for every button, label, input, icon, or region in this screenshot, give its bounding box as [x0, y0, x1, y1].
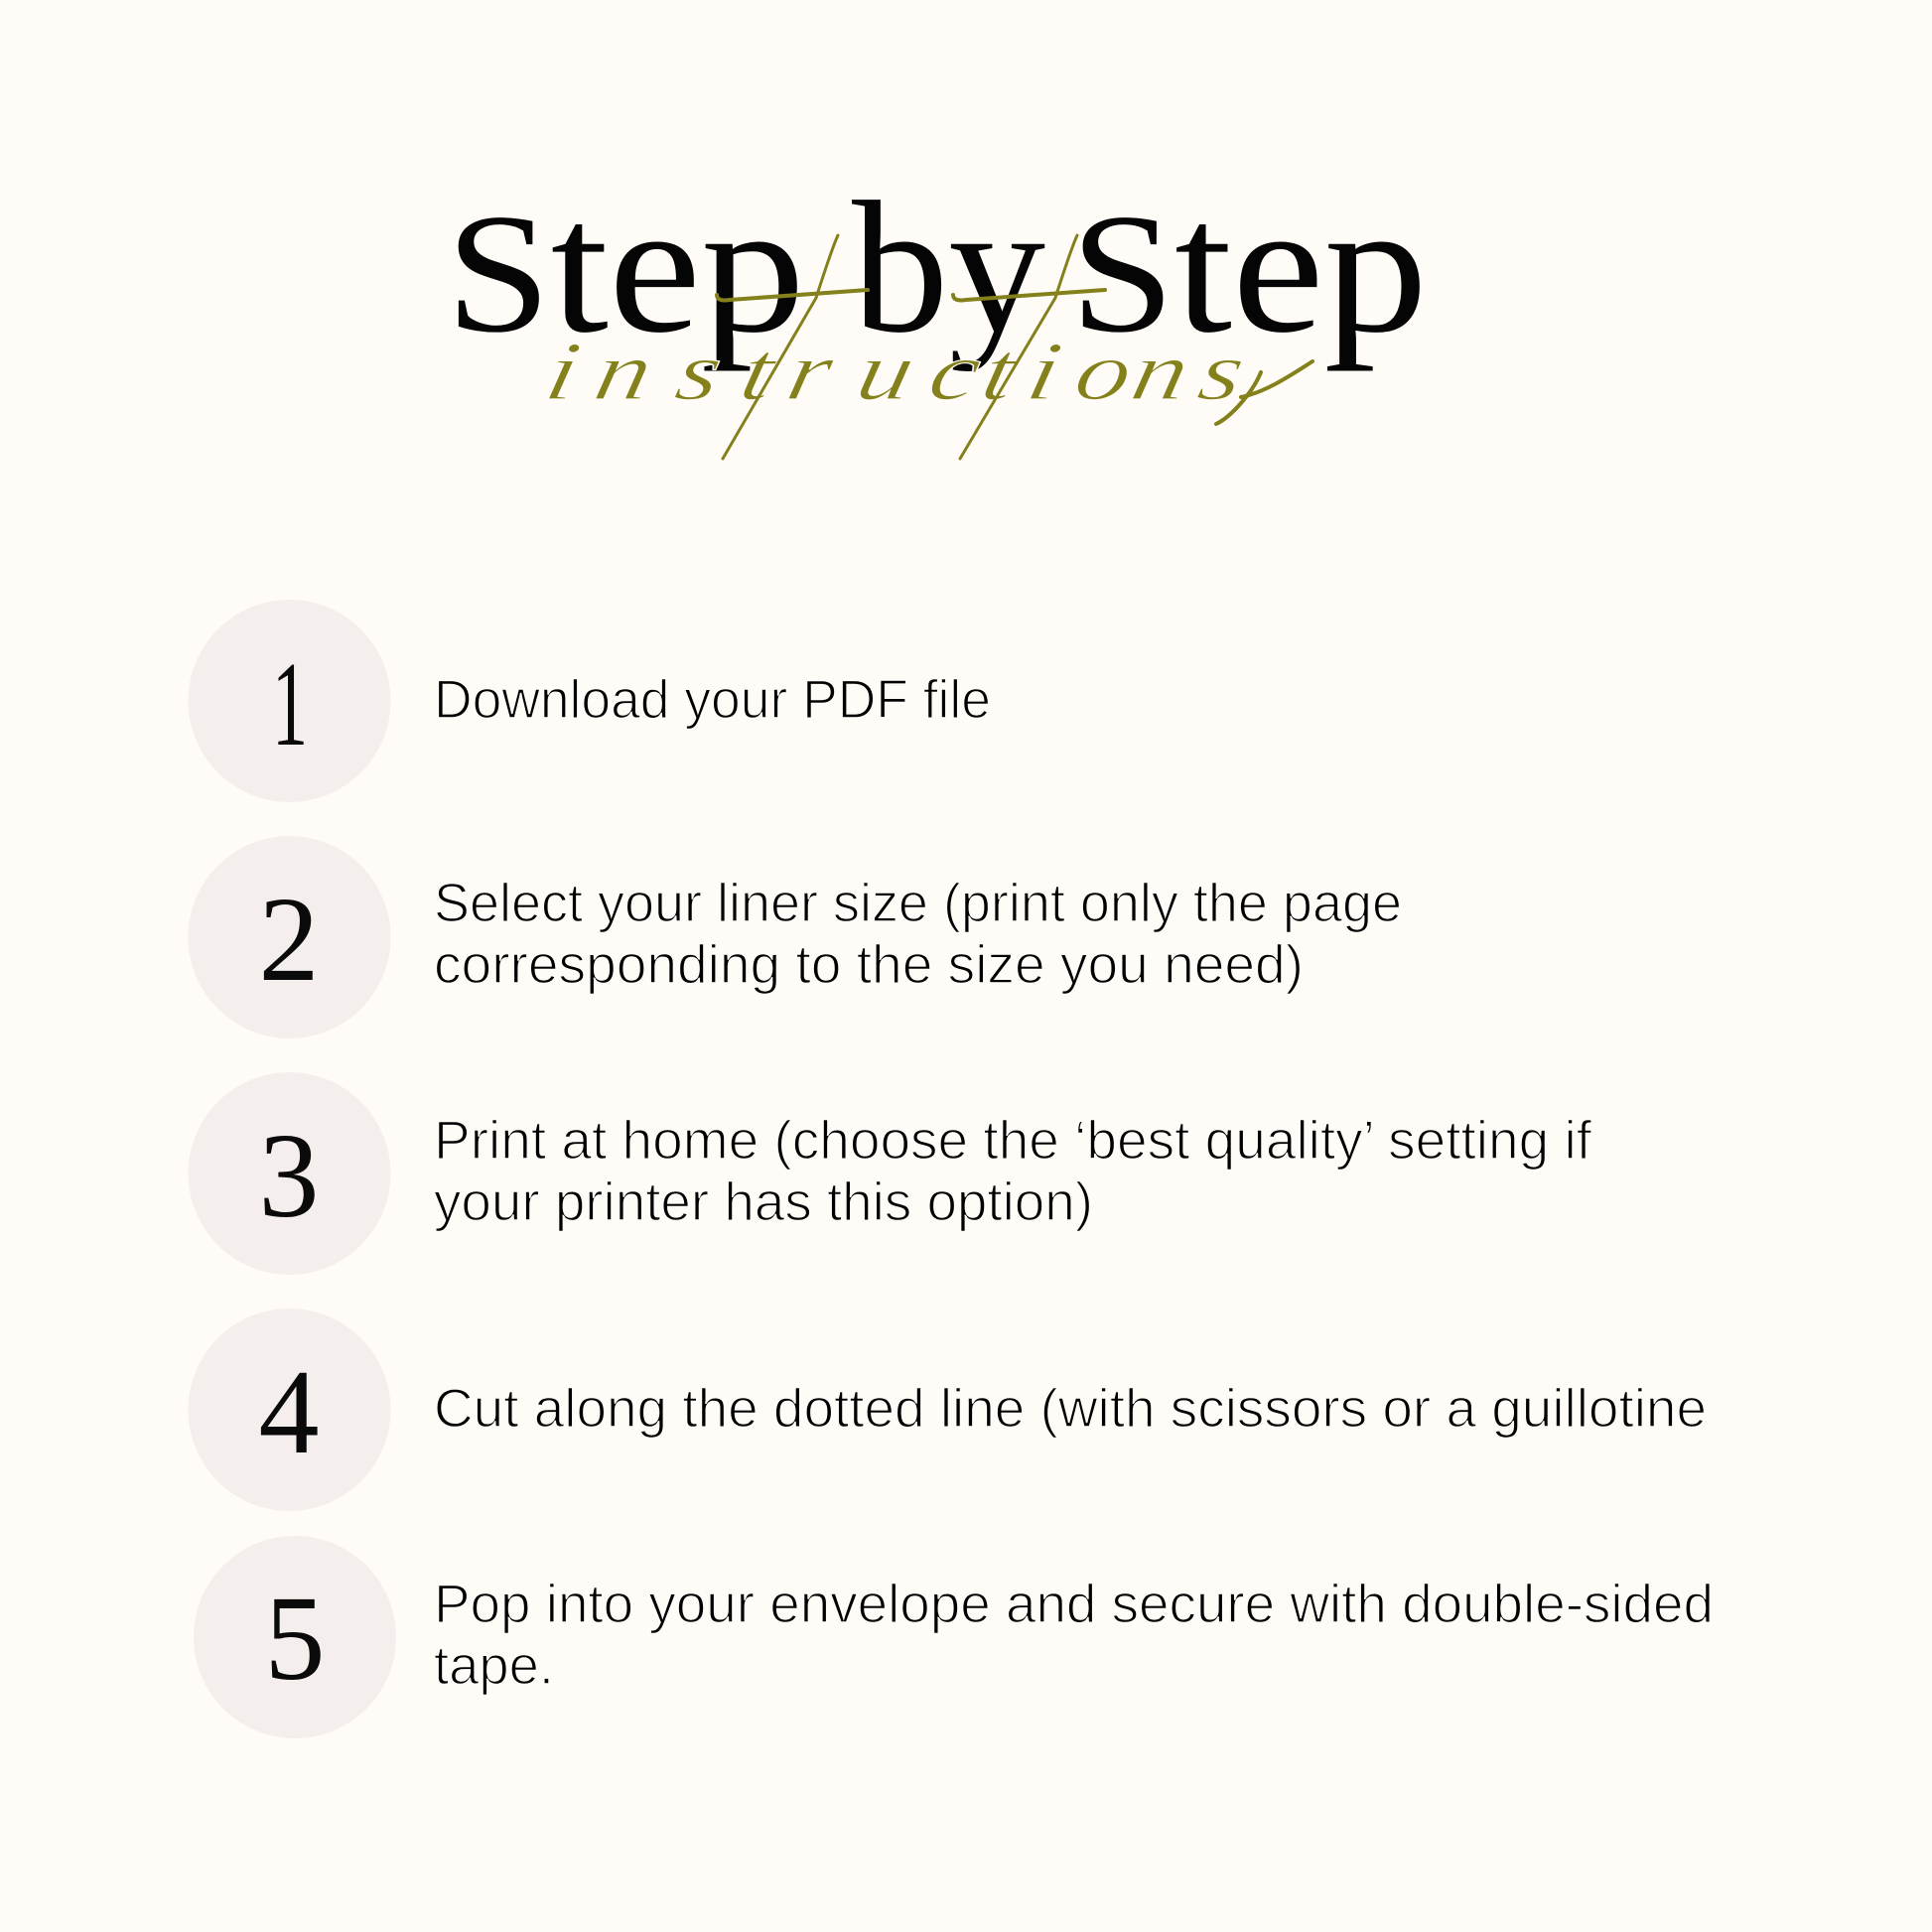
number badge 1 [189, 600, 391, 802]
step 1 [189, 600, 991, 802]
number badge 2: 2 [258, 873, 320, 1007]
step 5 [194, 1536, 1714, 1738]
step 2 text: corresponding to the size you need) [434, 933, 1304, 995]
heading: Step by Step [446, 164, 1428, 372]
number badge 5 [194, 1536, 396, 1738]
script subheading: instructions: instructions [538, 326, 1253, 418]
number badge 4 [189, 1309, 391, 1511]
step 3 [189, 1072, 1592, 1275]
step 2 text: Select your liner size (print only the page [434, 872, 1402, 933]
number badge 5: 5 [264, 1572, 326, 1706]
step 3 text: your printer has this option) [434, 1171, 1093, 1232]
number badge 4: 4 [258, 1345, 320, 1479]
number badge 2 [189, 836, 391, 1038]
step 3 text: Print at home (choose the ‘best quality’ setting if [434, 1109, 1592, 1171]
step 3 text [434, 1109, 1592, 1232]
heading: Step by Step: Step [446, 164, 805, 372]
step 5 text: Pop into your envelope and secure with double-sided [434, 1573, 1714, 1634]
title: Step by Step instructions [446, 164, 1428, 459]
number badge 1: 1 [272, 637, 308, 771]
number badge 3: 3 [258, 1109, 320, 1243]
step 5 text [434, 1573, 1714, 1696]
step 2 [189, 836, 1402, 1038]
step 2 text [434, 872, 1402, 995]
step 4 [189, 1309, 1707, 1511]
script subheading: instructions [538, 235, 1312, 459]
step 5 text: tape. [434, 1634, 554, 1696]
heading: Step by Step: Step [1070, 164, 1428, 372]
number badge 3 [189, 1072, 391, 1275]
step 4 text: Cut along the dotted line (with scissors or a guillotine [434, 1377, 1707, 1439]
heading: Step by Step: by [852, 164, 1045, 372]
step 1 text: Download your PDF file [434, 668, 991, 730]
